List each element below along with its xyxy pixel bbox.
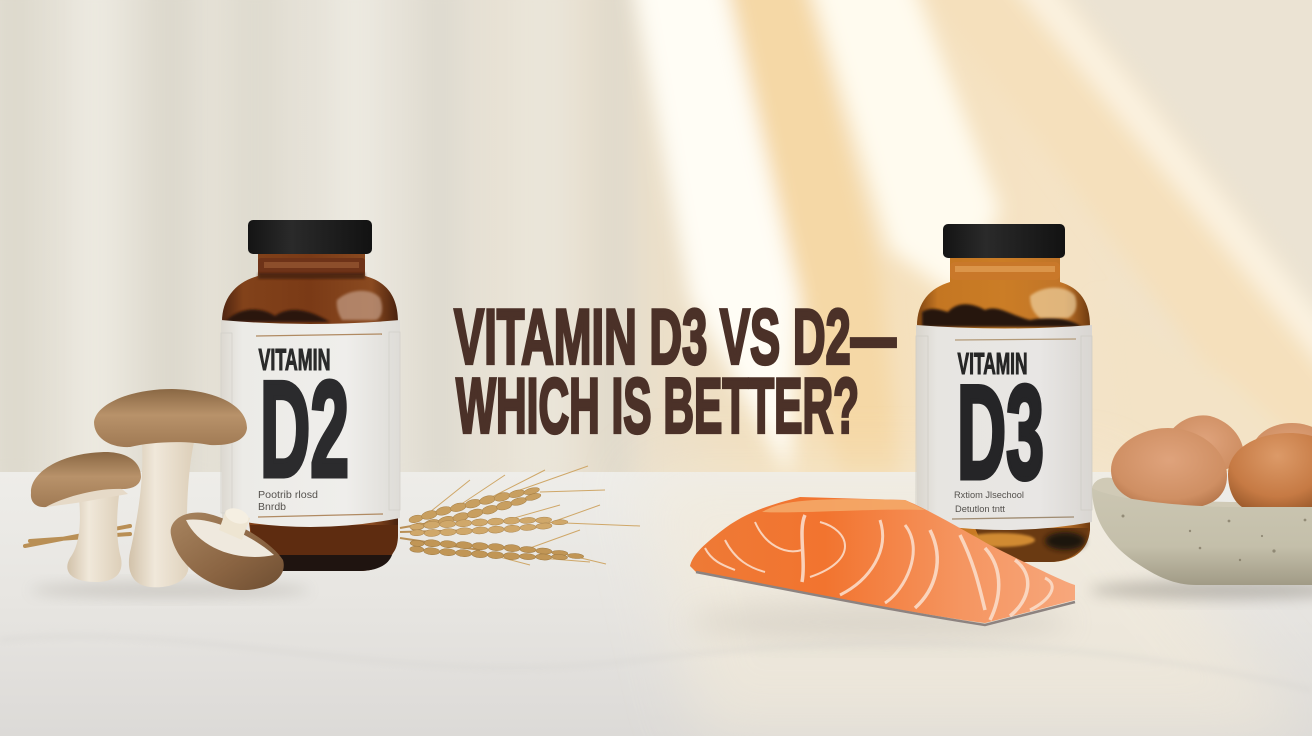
salmon fillet [690, 497, 1075, 625]
speckled bowl [1092, 488, 1312, 585]
upper wheat ear [408, 483, 542, 533]
title line 2: WHICH IS BETTER? [456, 362, 859, 450]
bottle: vitamin D2: Pootrib rlosd [258, 490, 318, 501]
wheat stalks [25, 466, 640, 565]
middle wheat ear [410, 514, 568, 538]
D3 black cap [943, 224, 1065, 258]
salmon top highlight [762, 499, 925, 512]
title [454, 292, 896, 450]
lower wheat ear [410, 538, 584, 564]
D2 label [221, 320, 400, 527]
salmon fat lines [705, 515, 1052, 620]
bottle: vitamin D3 [916, 224, 1092, 562]
front left egg [1111, 428, 1227, 508]
background: curtain wall and light rays [0, 0, 1312, 490]
wheat awns [430, 466, 640, 565]
D2 label text: VITAMIN [258, 342, 330, 377]
bottle: vitamin D2 [221, 220, 400, 571]
bottle: vitamin D3: Detutlon tntt [955, 504, 1006, 514]
wheat stems behind mushrooms [25, 526, 130, 546]
bottle: vitamin D2: Bnrdb [258, 502, 286, 513]
marble table [0, 472, 1312, 736]
fallen mushroom [171, 505, 284, 590]
title line 1: VITAMIN D3 VS D2— [454, 292, 896, 380]
D3 amber glass [917, 258, 1090, 562]
D2 black cap [248, 220, 372, 254]
bottle: vitamin D3: D3 [957, 359, 1044, 507]
salmon skin edge [696, 572, 1075, 625]
D2 amber glass [222, 254, 398, 571]
bowl of eggs [1092, 415, 1312, 585]
salmon flesh [690, 497, 1075, 623]
tall mushroom [94, 389, 247, 587]
mushrooms [31, 389, 284, 590]
D3 label [916, 325, 1092, 530]
bottle: vitamin D3: Rxtiom Jlsechool [954, 490, 1024, 501]
D3 label text: VITAMIN [958, 346, 1028, 381]
back eggs [1165, 415, 1244, 480]
bowl rim back [1092, 478, 1312, 520]
bottle: vitamin D2: D2 [260, 353, 349, 505]
small mushroom [31, 452, 141, 582]
wheat stems [400, 516, 480, 550]
front right egg [1228, 433, 1312, 510]
